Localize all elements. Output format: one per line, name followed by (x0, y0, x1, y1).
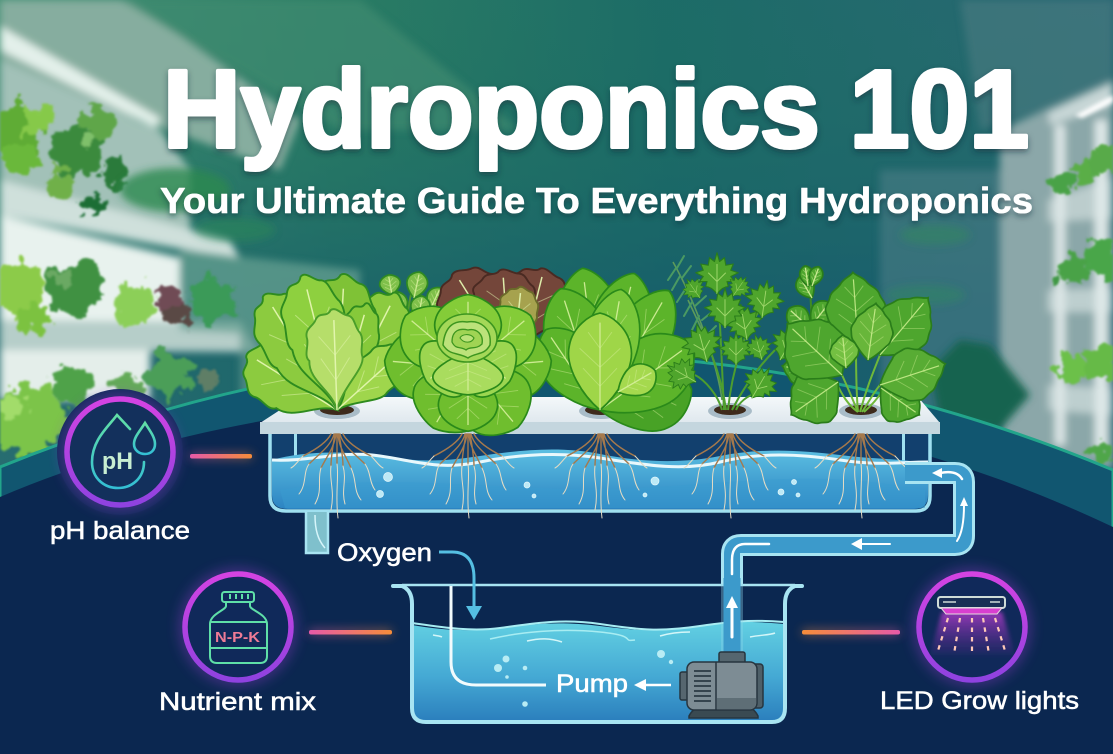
nutrient mix callout (185, 574, 291, 680)
plant: spinach (765, 265, 954, 437)
ring (919, 574, 1025, 680)
bubbles (376, 472, 800, 498)
plant: leaf lettuce (229, 267, 424, 439)
subtitle: Your Ultimate Guide To Everything Hydroponics (160, 180, 1033, 221)
pH balance callout (57, 389, 183, 515)
nutrient mix label: Nutrient mix (159, 688, 317, 716)
oxygen arrow (439, 552, 482, 620)
navy base panel with curved edge (0, 354, 1113, 754)
upper grow tank (270, 433, 930, 553)
pump arrow (634, 679, 671, 691)
reservoir (393, 585, 802, 722)
icon: pH drops (92, 415, 155, 488)
plant: oak leaf lettuce (523, 264, 711, 442)
plant: parsley and rosemary (659, 253, 814, 410)
ring (185, 574, 291, 680)
roots (291, 434, 907, 518)
plant: butterhead lettuce (382, 291, 554, 451)
bubbles (494, 650, 673, 707)
oxygen label: Oxygen (337, 539, 432, 567)
pump label: Pump (556, 670, 628, 698)
pH text: pH (102, 448, 133, 475)
NPK text: N-P-K (215, 629, 260, 646)
connector: LED (802, 630, 900, 634)
LED grow lights label: LED Grow lights (880, 687, 1079, 715)
back herb sprig (378, 270, 448, 322)
icon: LED fixture (930, 597, 1015, 655)
ring (67, 399, 173, 505)
pH balance label: pH balance (50, 517, 190, 545)
LED grow lights callout (919, 574, 1025, 680)
return pipe (726, 468, 968, 655)
white airline (451, 586, 546, 685)
pipe arrows (732, 472, 964, 637)
red leaf lettuce (426, 255, 576, 363)
pump (680, 652, 763, 718)
connector: pH (190, 454, 252, 458)
connector: nutrient (309, 630, 392, 634)
tank water (272, 450, 928, 509)
icon: NPK bottle (210, 592, 267, 663)
tray with net pots (260, 397, 940, 434)
title: Hydroponics 101 (163, 48, 1029, 171)
